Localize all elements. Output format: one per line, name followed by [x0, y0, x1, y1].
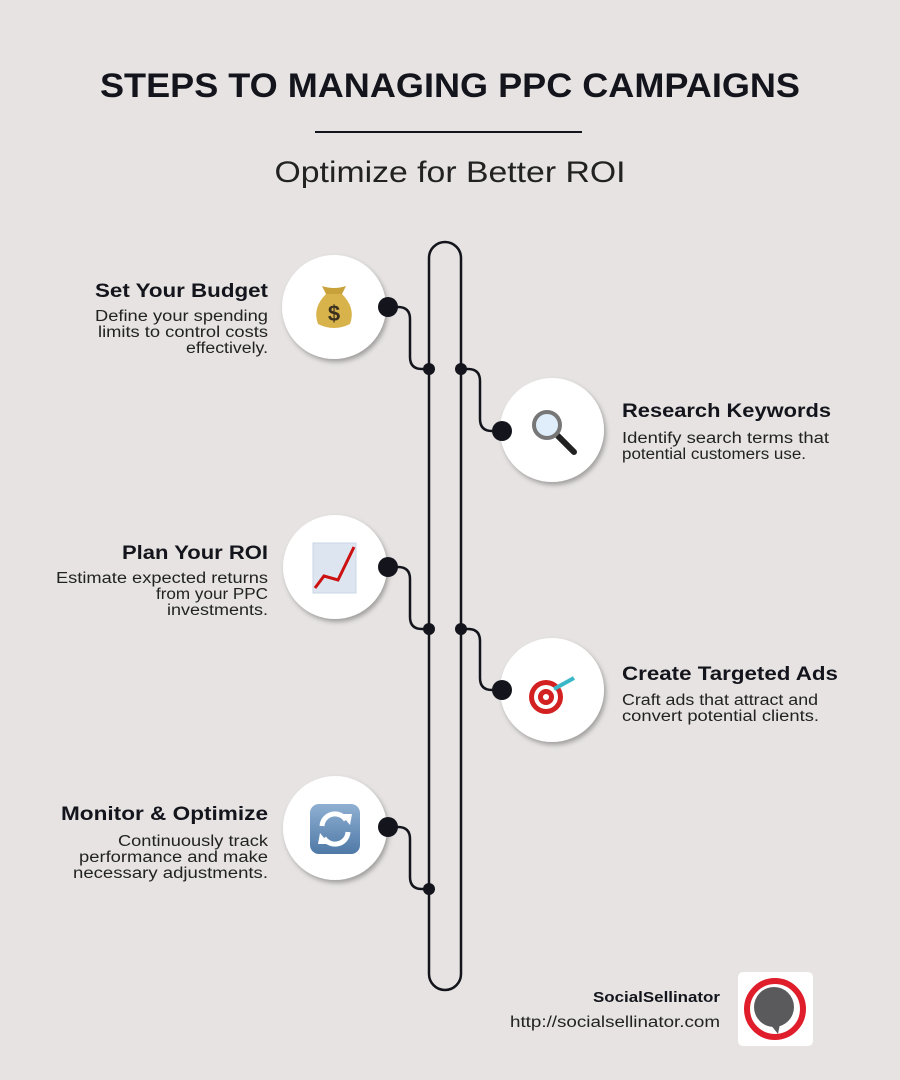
logo — [738, 972, 813, 1046]
step 1: set your budget: Set Your Budget — [95, 281, 269, 302]
icon: money bag: $ — [328, 301, 340, 326]
footer brand: http://socialsellinator.com — [510, 1014, 720, 1031]
timeline loop — [388, 242, 502, 990]
title: STEPS TO MANAGING PPC CAMPAIGNS — [100, 67, 800, 105]
step 3: plan your roi: Plan Your ROI — [122, 543, 268, 564]
step 5: monitor & optimize: Continuously track — [118, 833, 268, 850]
step 5: monitor & optimize: necessary adjustments. — [73, 865, 268, 882]
step 2: research keywords: Identify search terms that — [622, 430, 830, 447]
step 2: research keywords — [492, 378, 831, 482]
step 3: plan your roi: from your PPC — [156, 586, 268, 603]
step 2: research keywords: potential customers use. — [622, 446, 806, 463]
footer brand — [510, 989, 720, 1031]
step 1: set your budget: limits to control costs — [98, 324, 268, 341]
icon: magnifier — [534, 412, 574, 452]
step 3: plan your roi — [56, 515, 398, 619]
icon: refresh — [310, 804, 360, 854]
step 5: monitor & optimize: performance and make — [79, 849, 268, 866]
icon: target — [529, 678, 574, 714]
step 3: plan your roi: investments. — [167, 602, 268, 619]
subtitle: Optimize for Better ROI — [274, 156, 626, 189]
step 5: monitor & optimize: Monitor & Optimize — [61, 804, 268, 825]
step 4: create targeted ads: Create Targeted Ads — [622, 664, 838, 685]
step 1: set your budget: effectively. — [186, 340, 268, 357]
icon: chart — [313, 543, 356, 593]
step 4: create targeted ads — [492, 638, 838, 742]
step 4: create targeted ads: Craft ads that attract and — [622, 692, 818, 709]
step 4: create targeted ads: convert potential clients. — [622, 708, 819, 725]
step 3: plan your roi: Estimate expected returns — [56, 570, 268, 587]
step 2: research keywords: Research Keywords — [622, 401, 831, 422]
step 1: set your budget: Define your spending — [95, 308, 268, 325]
step 5: monitor & optimize — [61, 776, 398, 882]
footer brand: SocialSellinator — [593, 989, 720, 1006]
step 1: set your budget — [95, 255, 398, 359]
icon: money bag — [316, 286, 352, 328]
